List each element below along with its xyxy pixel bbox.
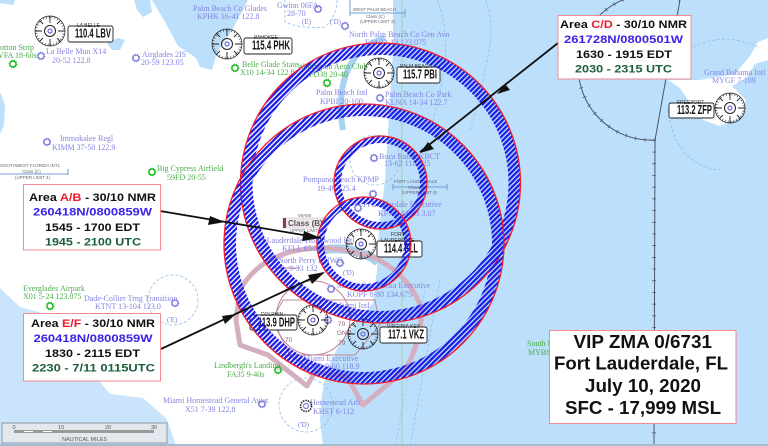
airport: Ft Lauderdale Executive xyxy=(354,190,442,218)
Miami Class B label xyxy=(283,213,327,233)
airport: Homestead ARB: KHST 6-112 xyxy=(313,407,354,416)
airspace letters: ('D) xyxy=(330,18,342,26)
West Palm Beach Class C label: Class (C) xyxy=(366,14,385,19)
airport: Miami Homestead General xyxy=(163,396,269,414)
airport: Boca Raton: Boca Raton KBCT xyxy=(379,152,440,161)
airport: Opa Locka Executive: Miami-Opa Locka Executive xyxy=(337,281,431,290)
airport: Wellington Aero Club: FD38 20-40 xyxy=(309,70,348,79)
title box: VIP notice: SFC - 17,999 MSL xyxy=(565,398,721,418)
frequency box: PHK: PAHOKEE xyxy=(254,35,278,41)
airport: Opa Locka Executive: KOPF 8-80 134.675 xyxy=(347,290,412,299)
callout: Area A/B xyxy=(24,184,160,250)
airport: Big Cypress xyxy=(148,164,223,182)
airport: Miami Executive xyxy=(300,354,359,371)
airport: Immokalee: KIMM 37-50 122.9 xyxy=(52,143,115,152)
airport: Miami Intl: KMIA xyxy=(342,309,364,318)
airport: La Belle: 20-52 122.8 xyxy=(52,56,91,65)
Class B altitude labels: 70 xyxy=(338,321,346,328)
frequency box: PBI xyxy=(397,64,440,83)
frequency box: LBV: LA BELLE xyxy=(77,23,100,29)
airport: Everglades Airpark: Everglades Airpark xyxy=(23,284,85,293)
airport: Miami Intl: Miami Intl xyxy=(335,301,370,310)
callout: Area E/F: 2230 - 7/11 0115UTC xyxy=(32,362,155,374)
airport: Ft Lauderdale-Hollywood xyxy=(258,236,355,253)
airport: Miami Executive: Miami Executive xyxy=(303,354,359,363)
airspace letters: ('D) xyxy=(343,269,355,277)
airport: La Belle xyxy=(37,47,106,65)
bottom frame edge xyxy=(0,444,768,446)
Miami Class B label: UPPER LIMIT 100 xyxy=(290,228,327,233)
airport: Palm Beach Intl xyxy=(316,88,368,106)
callout: Area C/D: 2030 - 2315 UTC xyxy=(575,64,672,76)
title box: VIP notice: VIP ZMA 0/6731 xyxy=(574,332,712,352)
Fort Lauderdale Class C label: (UPPER LIMIT 4) xyxy=(402,190,437,195)
frequency box: PBI: 115.7 PBI xyxy=(403,68,437,82)
frequency box: FLL: FORT xyxy=(391,232,405,238)
scale bar: 30 xyxy=(151,425,157,431)
Fort Lauderdale Class C label xyxy=(393,179,447,195)
airport: Palm Beach Co Glades: Palm Beach Co Glades xyxy=(193,4,267,13)
icon: VKZ VOR xyxy=(348,319,378,349)
West Palm Beach Class C label xyxy=(350,0,405,24)
scale bar: 20 xyxy=(105,425,111,431)
callout: Area A/B: 260418N/0800859W xyxy=(33,206,153,218)
Southwest Florida Class C label xyxy=(0,163,68,180)
airport: Lindbergh's Landing: FA35 9-40s xyxy=(227,370,264,379)
airport: Palm Beach Co Glades xyxy=(193,4,267,21)
callout: Area C/D: 261728N/0800501W xyxy=(564,34,684,46)
ring: Area D 10 NMR xyxy=(334,136,427,229)
airport: Palm Beach Co Park xyxy=(376,90,451,107)
airport: Miami Executive: KTMB 9-60 118.9 xyxy=(300,362,359,371)
airport: Gwinn: 28-70 xyxy=(287,9,306,18)
airport: Immokalee xyxy=(43,134,115,152)
airport: La Belle: La Belle Mun X14 xyxy=(46,47,106,56)
Class B altitude labels: GND xyxy=(337,330,352,337)
icon: PBI VOR xyxy=(364,58,394,88)
airport: Lindbergh's Landing xyxy=(214,361,282,379)
airport: Pompano Beach: 19-49 125.4 xyxy=(317,184,356,193)
title box: VIP notice: July 10, 2020 xyxy=(585,376,701,396)
airport: Cotton Strip xyxy=(0,43,37,68)
airport: Miami Homestead General: X51 7-39 122.8 xyxy=(185,405,235,414)
Class B altitude labels: 70 xyxy=(285,337,293,344)
frequency box: ZFP xyxy=(669,100,714,118)
frequency box: VKZ xyxy=(380,324,427,343)
airport: North Perry: North Perry KHWO xyxy=(278,256,343,265)
Southwest Florida Class C label: SOUTHWEST FLORIDA INTL xyxy=(0,163,61,168)
airport: Cotton Strip: otton Strip xyxy=(0,43,34,52)
airport: South Bimini: MYBS xyxy=(528,348,551,357)
dashed airspace boundaries xyxy=(148,0,758,446)
airport: Palm Beach Intl: Palm Beach Intl xyxy=(316,88,368,97)
frequency box: DHP: 113.9 DHP xyxy=(258,316,295,330)
airport: Everglades Airpark: X01 5-24 123.075 xyxy=(23,292,81,301)
airport: Ft Lauderdale Executive: Ft Lauderdale Executive xyxy=(363,200,442,209)
airport: Gwinn: Gwinn 06FA xyxy=(277,1,319,10)
VOR frequency boxes xyxy=(68,23,714,343)
arrow: Area C/D pointer xyxy=(420,43,558,153)
airport: Palm Beach Co Glades: KPHK 16-41 122.8 xyxy=(197,12,259,21)
frequency box: DHP: DOLPHIN xyxy=(261,312,284,318)
frequency box: ZFP: FREEPORT xyxy=(677,100,704,106)
airport: South Bimini: South Bimini xyxy=(527,339,571,348)
airport: North Palm Beach xyxy=(341,22,450,47)
airport: North Perry xyxy=(278,256,344,273)
frequency box: FLL: 114.4 FLL xyxy=(384,242,418,256)
airport: Wellington Aero Club: Wellington Aero Club xyxy=(297,62,367,71)
airport: North Palm Beach: North Palm Beach Co Gen Avn xyxy=(349,30,450,39)
airport: Miami Homestead General: Miami Homestead General Aviat xyxy=(163,396,269,405)
airport: Immokalee: Immokalee Regl xyxy=(60,134,114,143)
small inland water bodies xyxy=(0,0,125,134)
airport: Boca Raton xyxy=(370,152,440,168)
icon: DHP VOR xyxy=(298,305,328,335)
airport: Palm Beach Intl: KPBI 20-100 xyxy=(320,97,363,106)
frequency box: DHP xyxy=(250,312,297,330)
airport: Belle Glade State: Belle Glade State xyxy=(242,60,298,69)
frequency box: ZFP: 113.2 ZFP xyxy=(677,103,712,117)
airport: Pompano Beach xyxy=(303,175,380,193)
airport: Dade-Collier: KTNT 13-104 123.0 xyxy=(95,302,161,311)
airspace letters: ('E) xyxy=(167,316,178,324)
Grand Bahama island xyxy=(668,38,768,126)
ADIZ green line xyxy=(401,0,403,446)
airspace letters: (E) xyxy=(302,18,312,26)
Miami Class B label: MIAMI xyxy=(298,213,311,218)
airport: Airglades: 20-59 123.05 xyxy=(141,58,184,67)
scale bar xyxy=(2,423,167,443)
frequency box: PHK xyxy=(244,35,292,54)
Southwest Florida Class C label: (UPPER LIMIT 4) xyxy=(15,175,50,180)
airport: Palm Beach Co Park: KLNA 14-34 122.7 xyxy=(385,98,447,107)
callout: Area C/D: 1630 - 1915 EDT xyxy=(576,49,672,61)
Southwest Florida Class C label: Class (C) xyxy=(22,169,41,174)
airport: Homestead ARB: Homestead Arb xyxy=(310,398,360,407)
West Palm Beach Class C label: (UPPER LIMIT 4) xyxy=(360,19,395,24)
airport: Airglades: Airglades 2IS xyxy=(142,50,186,59)
callout: Area E/F xyxy=(24,314,160,381)
arrow: Area E/F pointer xyxy=(161,272,325,349)
icon: Homestead beacon xyxy=(300,400,312,412)
Lake Okeechobee xyxy=(134,0,248,70)
airport: North Palm Beach: F44 23-13 123.075 xyxy=(365,38,426,47)
Class B altitude labels xyxy=(285,285,352,347)
frequency box: VKZ: VIRGINIA KEY xyxy=(387,324,421,330)
callout: Area E/F: 260418N/0800859W xyxy=(34,333,153,345)
airport: Grand Bahama: Grand Bahama Intl xyxy=(704,68,766,77)
Bahamas compass rose arc xyxy=(578,0,680,446)
airport labels: green non-towered fields xyxy=(0,43,571,379)
airport: Airglades xyxy=(132,50,186,67)
icon: PHK VOR xyxy=(212,29,242,59)
ring: Area B 10 NMR xyxy=(317,197,411,291)
icon: LBV VOR xyxy=(35,16,65,46)
airport: Belle Glade State xyxy=(231,60,298,77)
airport: Big Cypress: Big Cypress Airfield xyxy=(157,164,223,173)
airport: Gwinn xyxy=(277,1,322,18)
airport: Ft Lauderdale Executive: KFXE 13-63 3.07 xyxy=(378,209,436,218)
Class B altitude labels: 70 xyxy=(338,340,346,347)
airport: Opa Locka Executive xyxy=(327,281,431,299)
callout: Area E/F: 1830 - 2115 EDT xyxy=(45,348,140,360)
airport: Big Cypress: 59FD 20-55 xyxy=(167,173,206,182)
airport: North Perry: 9-33 132 xyxy=(289,264,318,273)
frequency box: PBI: PALM BEACH xyxy=(400,64,432,70)
callout: Area A/B: Area A/B - 30/10 NMR xyxy=(29,192,156,204)
Fort Lauderdale Class C label: Class (C) xyxy=(408,185,427,190)
icon: FLL VOR xyxy=(346,229,376,259)
callout: Area A/B: 1945 - 2100 UTC xyxy=(45,236,141,248)
ring: Area A 30 NMR xyxy=(224,104,504,384)
airspace letters xyxy=(167,18,355,429)
arrow: Area A/B pointer xyxy=(160,211,321,241)
title box: VIP notice: Fort Lauderdale, FL xyxy=(554,354,728,374)
airport: Lindbergh's Landing: Lindbergh's Landing xyxy=(214,361,280,370)
airport: Palm Beach Co Park: Palm Beach Co Park xyxy=(385,90,451,99)
callout: Area C/D xyxy=(558,16,691,79)
ocean east of Florida xyxy=(320,0,768,446)
airport: Homestead ARB xyxy=(310,398,360,416)
frequency box: PHK: 115.4 PHK xyxy=(252,38,290,52)
airport: Miami Intl xyxy=(324,301,370,324)
callout: Area E/F: Area E/F - 30/10 NMR xyxy=(31,318,155,330)
airport: Dade-Collier: Dade-Collier Trng Transition xyxy=(84,294,177,303)
ring: Area C 30 NMR xyxy=(240,43,520,323)
scale bar: NAUTICAL MILES xyxy=(62,437,107,443)
airspace letters: ('D) xyxy=(298,421,310,429)
Florida Bay xyxy=(0,288,176,446)
West Palm Beach Class C label: WEST PALM BEACH xyxy=(353,7,396,12)
airport: Dade-Collier xyxy=(84,294,179,311)
Class B altitude labels: 30 xyxy=(285,285,293,292)
airspace tint bands xyxy=(323,38,385,262)
airport: Ft Lauderdale-Hollywood: KFLL 65-90 xyxy=(282,244,322,253)
airport: Wellington Aero Club xyxy=(297,62,367,87)
airport: Grand Bahama: MYGF 7-109 xyxy=(712,76,756,85)
frequency box: FLL xyxy=(377,232,422,257)
airport: Belle Glade State: X10 14-34 122.8 xyxy=(240,68,294,77)
frequency box: VKZ: 117.1 VKZ xyxy=(388,328,424,342)
frequency box: LBV: 110.4 LBV xyxy=(75,26,111,40)
airport: South Bimini xyxy=(527,339,571,357)
frequency box: LBV xyxy=(68,23,113,42)
icon: ZFP VOR xyxy=(715,93,745,123)
Miami Class B airspace xyxy=(236,248,422,405)
callout: Area A/B: 1545 - 1700 EDT xyxy=(45,222,140,234)
callout: Area C/D: Area C/D - 30/10 NMR xyxy=(560,19,687,31)
frequency box: FLL: LAUDERDALE xyxy=(381,238,415,244)
airport: Ft Lauderdale-Hollywood: Ft Lauderdale-Hollywood Intl xyxy=(258,236,355,245)
airport: Boca Raton: 13-62 118.925 xyxy=(384,159,430,168)
airport: Pompano Beach: Pompano Beach KPMP xyxy=(303,175,380,184)
airport: Grand Bahama xyxy=(704,68,766,85)
airport: Everglades Airpark xyxy=(23,284,85,310)
Miami Class B label: Class (B) xyxy=(288,219,323,228)
title box: VIP notice xyxy=(550,330,736,424)
TFR rings xyxy=(224,43,520,384)
Fort Lauderdale Class C label: FORT LAUDERDALE xyxy=(394,179,437,184)
scale bar: 10 xyxy=(58,425,64,431)
scale bar: 0 xyxy=(12,425,16,431)
